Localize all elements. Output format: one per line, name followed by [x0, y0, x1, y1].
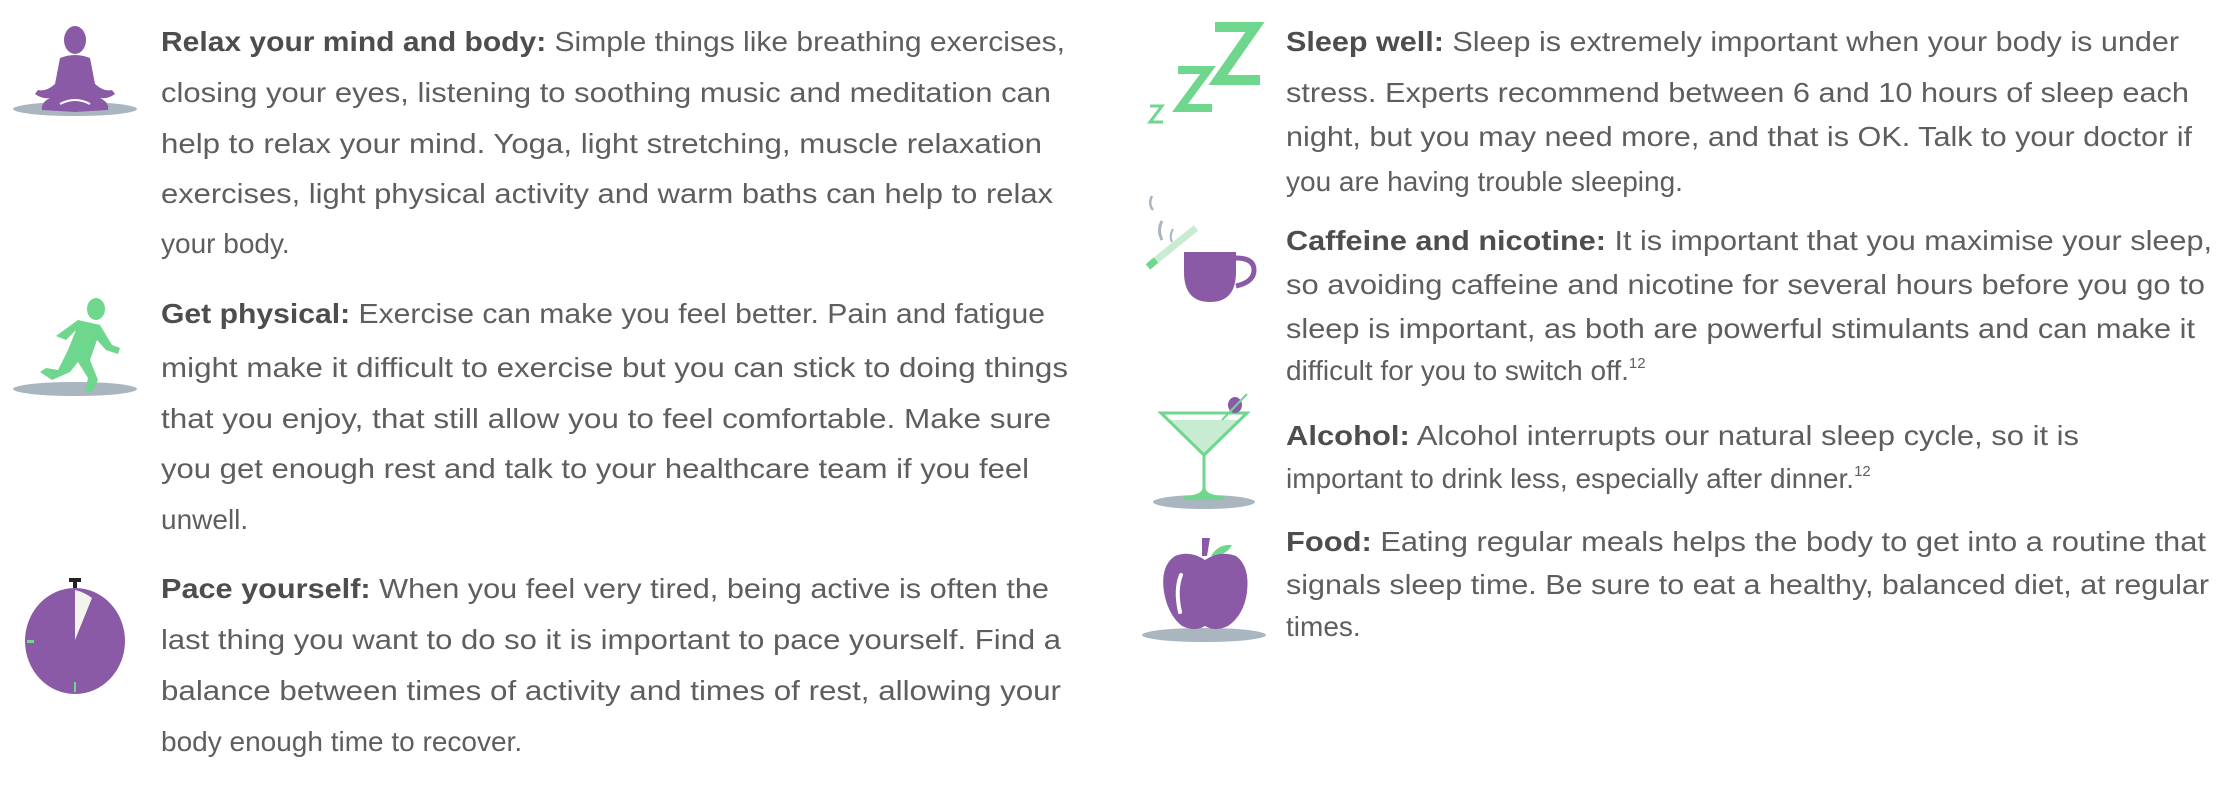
icon: apple [1142, 538, 1266, 642]
text: food: signals sleep time. Be sure to eat a healthy, balanced diet, at regular [1286, 569, 2209, 600]
icon: coffee and cigarette [1148, 196, 1254, 302]
text: relax your mind and body: Relax your mind and body: Simple things like breathing exercises, [161, 26, 1065, 57]
icon: martini [1153, 394, 1255, 509]
text: relax your mind and body: exercises, light physical activity and warm baths can help to relax [161, 178, 1053, 209]
icon: runner [13, 298, 137, 396]
text: food [1286, 526, 2209, 642]
text: pace yourself: body enough time to recover. [161, 726, 522, 757]
text: get physical: that you enjoy, that still allow you to feel comfortable. Make sure [161, 403, 1051, 434]
icon: zzz [1150, 27, 1260, 122]
text: sleep well: night, but you may need more, and that is OK. Talk to your doctor if [1286, 121, 2192, 152]
text: alcohol: important to drink less, especially after dinner. [1286, 463, 1854, 494]
text: sleep well: stress. Experts recommend between 6 and 10 hours of sleep each [1286, 77, 2189, 108]
text: pace yourself: last thing you want to do so it is important to pace yourself. Find a [161, 624, 1061, 655]
text: get physical: Get physical: Exercise can make you feel better. Pain and fatigue [161, 298, 1045, 329]
text: pace yourself: balance between times of activity and times of rest, allowing your [161, 675, 1061, 706]
text: get physical: you get enough rest and talk to your healthcare team if you feel [161, 453, 1029, 484]
text: relax your mind and body: closing your eyes, listening to soothing music and meditation can [161, 77, 1051, 108]
text: get physical [161, 298, 1068, 535]
text: alcohol: 12 [1854, 463, 1871, 480]
icon: stopwatch [25, 578, 125, 694]
text: alcohol [1286, 420, 2079, 494]
text: get physical: unwell. [161, 504, 248, 535]
text: relax your mind and body: your body. [161, 228, 290, 259]
text: caffeine and nicotine: sleep is important, as both are powerful stimulants and can make it [1286, 313, 2195, 344]
text: sleep well [1286, 26, 2192, 197]
text: get physical: might make it difficult to exercise but you can stick to doing things [161, 352, 1068, 383]
text: relax your mind and body [161, 26, 1065, 259]
text: pace yourself [161, 573, 1061, 757]
text: caffeine and nicotine: so avoiding caffeine and nicotine for several hours before you go to [1286, 269, 2205, 300]
text: caffeine and nicotine: Caffeine and nicotine: It is important that you maximise your sleep, [1286, 225, 2212, 256]
text: relax your mind and body: help to relax your mind. Yoga, light stretching, muscle relaxation [161, 128, 1042, 159]
text: caffeine and nicotine: difficult for you to switch off. [1286, 355, 1629, 386]
icon: meditation [13, 26, 137, 116]
text: caffeine and nicotine [1286, 225, 2212, 386]
text: food: times. [1286, 611, 1361, 642]
text: sleep well: Sleep well: Sleep is extremely important when your body is under [1286, 26, 2179, 57]
text: food: Food: Eating regular meals helps the body to get into a routine that [1286, 526, 2206, 557]
text: caffeine and nicotine: 12 [1629, 355, 1646, 372]
text: alcohol: Alcohol: Alcohol interrupts our natural sleep cycle, so it is [1286, 420, 2079, 451]
text: sleep well: you are having trouble sleeping. [1286, 166, 1683, 197]
text: pace yourself: Pace yourself: When you feel very tired, being active is often the [161, 573, 1049, 604]
